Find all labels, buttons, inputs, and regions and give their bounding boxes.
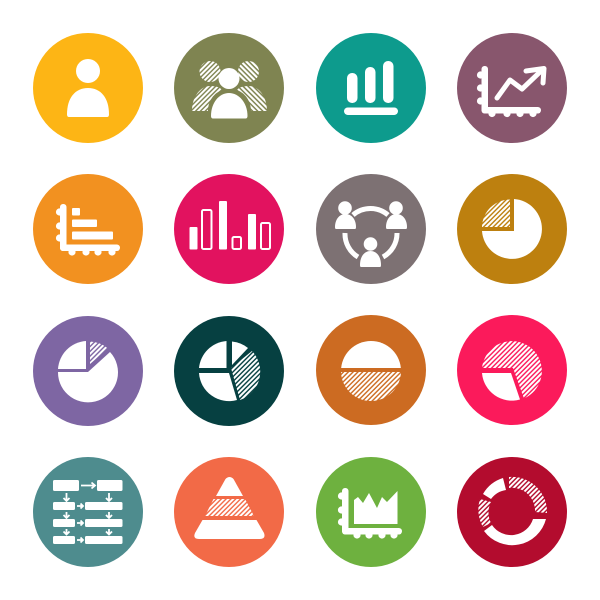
- icon: layered pyramid on coral circle: [174, 457, 284, 567]
- icon: group of people on olive circle: [174, 33, 284, 143]
- icon: half white half hatched circle on rust circle: [316, 315, 426, 425]
- icon: person on yellow circle: [33, 33, 143, 143]
- icon: three-part pie chart on dark teal circle: [174, 316, 284, 426]
- icon: pie chart with hatched slice on purple circle: [33, 316, 143, 426]
- icon: mixed solid and outlined bars on magenta circle: [174, 174, 284, 284]
- icon: bar chart on teal circle: [316, 33, 426, 143]
- icon: horizontal bar chart on orange circle: [33, 174, 143, 284]
- icon: rising line chart on plum circle: [457, 33, 567, 143]
- icon: mostly hatched pie chart on hot pink circle: [457, 315, 567, 425]
- icon: connected people on grey circle: [316, 174, 426, 284]
- icon: segmented donut chart on crimson circle: [457, 457, 567, 567]
- icon: pie chart with hatched quarter on ochre circle: [457, 174, 567, 284]
- icon: flow chart on slate teal circle: [33, 457, 143, 567]
- icon: area chart on green circle: [316, 457, 426, 567]
